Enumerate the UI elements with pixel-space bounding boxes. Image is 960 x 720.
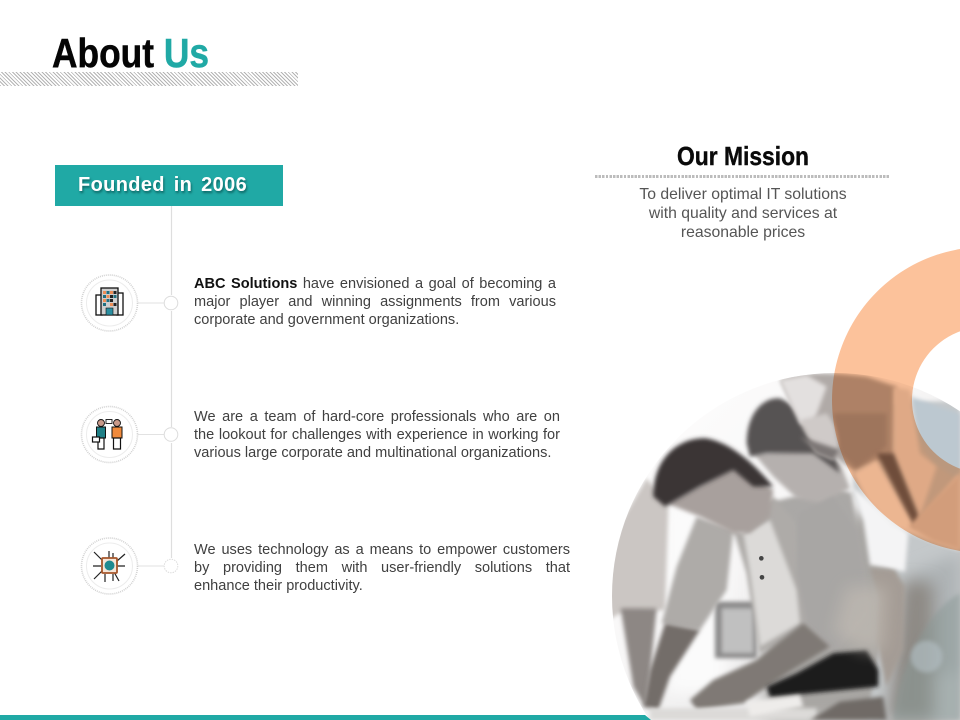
mission heading: Our Mission <box>677 141 809 171</box>
icon: building <box>82 275 138 331</box>
paragraph 3: by providing them with user-friendly solutions that <box>194 560 570 576</box>
mission text <box>639 186 847 241</box>
paragraph 1: ABC Solutions have envisioned a goal of becoming a <box>194 276 556 292</box>
timeline <box>80 206 178 595</box>
mission text: reasonable prices <box>681 224 805 241</box>
right man body <box>853 400 960 720</box>
icon: two people <box>82 406 138 462</box>
paragraph 2: the lookout for challenges with experience in working for <box>194 427 560 443</box>
founded banner: Founded in 2006 <box>78 174 247 196</box>
lens flare <box>893 593 960 720</box>
paragraph 2 <box>194 409 560 461</box>
icon: chip with brain <box>82 538 138 594</box>
right forearm <box>870 568 905 687</box>
woman sweater <box>774 490 856 548</box>
paragraph 2: various large corporate and multinational organizations. <box>194 445 551 461</box>
man hair <box>653 438 773 507</box>
man sweater <box>660 496 778 653</box>
mission text: with quality and services at <box>649 205 837 222</box>
table and papers <box>650 708 817 720</box>
woman hair <box>747 398 840 473</box>
paragraph 1 <box>194 276 556 328</box>
title stripe band <box>0 72 298 86</box>
right man head <box>780 373 897 470</box>
bottom bar <box>0 715 651 720</box>
man undershirt <box>743 520 800 647</box>
founded banner <box>55 165 283 206</box>
left person <box>607 478 668 620</box>
arms <box>643 623 700 710</box>
paragraph 1: corporate and government organizations. <box>194 312 459 328</box>
beard <box>833 413 887 468</box>
shirt under ring <box>853 460 960 550</box>
paragraph 3 <box>194 542 570 594</box>
paragraph 3: enhance their productivity. <box>194 578 363 594</box>
mission text: To deliver optimal IT solutions <box>639 186 847 203</box>
man face <box>667 467 773 533</box>
mission divider <box>595 175 889 178</box>
backdrop <box>675 624 724 690</box>
title: About Us <box>52 30 209 76</box>
paragraph 3: We uses technology as a means to empower customers <box>194 542 570 558</box>
black shirt part <box>767 650 878 697</box>
photo with overlay ring <box>612 249 960 720</box>
woman neck and face <box>753 448 850 503</box>
paragraph 2: We are a team of hard-core professionals who are on <box>194 409 560 425</box>
orange ring <box>832 247 960 553</box>
tie shadow <box>877 453 920 527</box>
paragraph 1: major player and winning assignments from various <box>194 294 556 310</box>
white shirt under <box>852 487 908 572</box>
